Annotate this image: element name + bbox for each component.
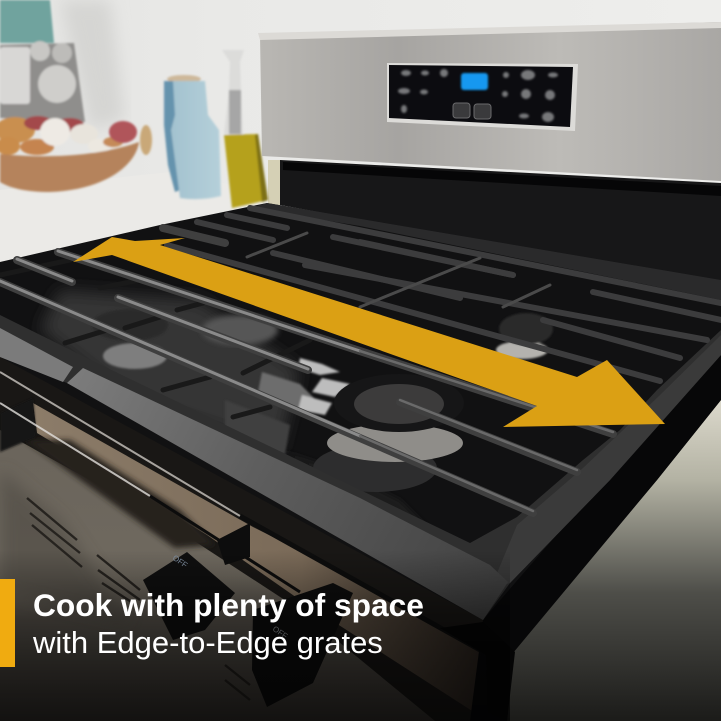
accent bar xyxy=(0,579,15,667)
mid rails xyxy=(0,228,613,513)
rear left burner xyxy=(202,315,278,345)
side cabinet xyxy=(507,400,721,721)
caption shading xyxy=(0,550,510,721)
fruit bowl xyxy=(0,116,152,192)
yellow double-headed arrow xyxy=(73,237,665,427)
bright steel patches xyxy=(225,358,350,455)
grate textured front lip xyxy=(0,315,721,620)
control panel xyxy=(387,63,578,131)
rear knob shadow xyxy=(217,523,250,565)
knob one: OFF xyxy=(171,553,189,570)
knob one xyxy=(143,552,235,640)
stainless backguard xyxy=(260,22,721,181)
lower oven door panel xyxy=(0,430,435,721)
cross bars xyxy=(0,260,310,417)
countertop xyxy=(0,172,280,264)
caption: Cook with plenty of space xyxy=(33,587,424,623)
left lip segment xyxy=(0,328,73,382)
teal wall sign xyxy=(0,0,54,43)
rear rails xyxy=(167,208,721,381)
knob two xyxy=(252,583,353,707)
olive oil bottle xyxy=(222,50,268,208)
brown reflection stripe xyxy=(33,403,480,716)
dark lip border xyxy=(0,315,721,620)
right rear burner xyxy=(496,313,553,359)
kitchen shelf items xyxy=(0,0,268,208)
control knobs xyxy=(143,523,353,707)
main lip segment xyxy=(67,368,508,620)
vent slots xyxy=(27,498,250,700)
left burner xyxy=(92,309,168,341)
range front panel xyxy=(0,350,513,721)
touch buttons xyxy=(453,103,491,119)
main burner xyxy=(313,374,464,492)
digital clock display xyxy=(461,73,488,90)
black range edge xyxy=(470,335,721,721)
caption: with Edge-to-Edge grates xyxy=(33,625,383,660)
knob two: OFF xyxy=(271,624,289,641)
kitchen wall xyxy=(0,0,721,300)
burners and cooktop surfaces xyxy=(40,290,553,540)
cooking grate bars xyxy=(0,208,721,513)
cooktop grate body xyxy=(0,203,721,620)
picture frame xyxy=(0,41,85,122)
dark glass rear of the range xyxy=(280,160,721,285)
caption xyxy=(33,587,424,660)
blue grinder bottle xyxy=(164,75,221,199)
grey cooktop reflections xyxy=(40,290,300,450)
rail highlights xyxy=(0,251,360,436)
rear ledge xyxy=(250,203,721,300)
